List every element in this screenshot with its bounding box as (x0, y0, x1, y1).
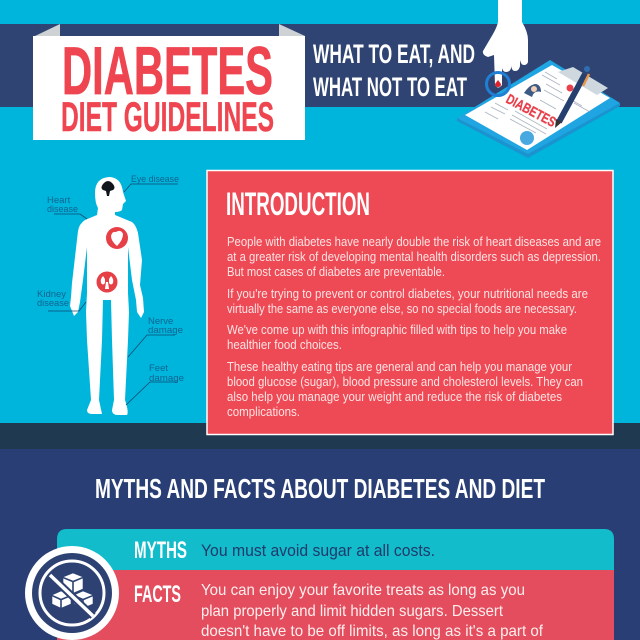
paragraph 3: We've come up with this infographic filled with tips to help you make (227, 323, 567, 337)
icon: hand pointing with blood drop (483, 0, 528, 96)
myth text: You must avoid sugar at all costs. (201, 541, 435, 560)
facts label: FACTS (134, 581, 181, 608)
label: feet damage: Feet (149, 363, 168, 374)
myths label: MYTHS (134, 537, 187, 564)
paragraph 1: People with diabetes have nearly double the risk of heart diseases and are (227, 235, 601, 249)
label: nerve damage: Nerve (148, 316, 173, 327)
panel: introduction (207, 170, 613, 434)
body diagram (37, 174, 184, 415)
subtitle: WHAT NOT TO EAT (313, 72, 467, 102)
title ribbon (33, 24, 305, 140)
paragraph 4: blood glucose (sugar), blood pressure and cholesterol levels. They can (227, 375, 583, 389)
paragraph 2: If you're trying to prevent or control diabetes, your nutritional needs are (227, 287, 588, 301)
paragraph 4: These healthy eating tips are general and can help you manage your (227, 360, 572, 374)
paragraph 4: complications. (227, 405, 300, 419)
paragraph 2: virtually the same as everyone else, so no special foods are necessary. (227, 302, 577, 316)
paragraph 4 (227, 360, 583, 419)
fact text: doesn't have to be off limits, as long as it's a part of (201, 623, 544, 640)
paragraph 4: also help you manage your weight and reduce the risk of diabetes (227, 390, 562, 404)
icon: heart (106, 227, 128, 249)
sugar cubes (52, 573, 93, 608)
paragraph 3: healthier food choices. (227, 338, 342, 352)
icon: brain (102, 181, 114, 196)
body diagram: disease (47, 204, 78, 215)
dark strip (0, 423, 640, 449)
body diagram: damage (148, 325, 183, 336)
paragraph 1 (227, 235, 601, 279)
paragraph 3 (227, 323, 567, 352)
icon: no sugar cubes (25, 546, 119, 640)
label: kidney disease: Kidney (37, 289, 66, 300)
paragraph 1: at a greater risk of developing mental health disorders such as depression. (227, 250, 601, 264)
title: diabetes: DIABETES (62, 33, 273, 109)
panel: myth (57, 529, 614, 570)
fact text: You can enjoy your favorite treats as long as you (201, 582, 525, 599)
subtitle (313, 39, 475, 102)
body diagram: disease (37, 298, 69, 309)
label: heart disease: Heart (47, 195, 71, 206)
heading: introduction: INTRODUCTION (226, 186, 370, 222)
title: diet guidelines: DIET GUIDELINES (61, 93, 274, 140)
fact text (201, 582, 544, 640)
fact text: plan properly and limit hidden sugars. Dessert (201, 603, 504, 620)
icon: kidneys (96, 272, 118, 292)
header band (0, 24, 640, 107)
icon: clipboard with diabetes form (457, 60, 620, 158)
label: eye disease: Eye disease (131, 174, 179, 185)
panel: fact (57, 570, 614, 640)
subtitle: WHAT TO EAT, AND (313, 39, 475, 69)
paragraph 2 (227, 287, 588, 316)
clipboard heading: DIABETES (504, 91, 559, 130)
paragraph 1: But most cases of diabetes are preventable. (227, 265, 445, 279)
navy section background (0, 449, 640, 640)
leader lines (48, 184, 178, 405)
icon: pen (555, 66, 590, 128)
doctor avatar (524, 84, 541, 97)
body silhouette (70, 177, 144, 415)
body diagram: damage (149, 373, 184, 384)
prohibition slash (50, 575, 93, 616)
